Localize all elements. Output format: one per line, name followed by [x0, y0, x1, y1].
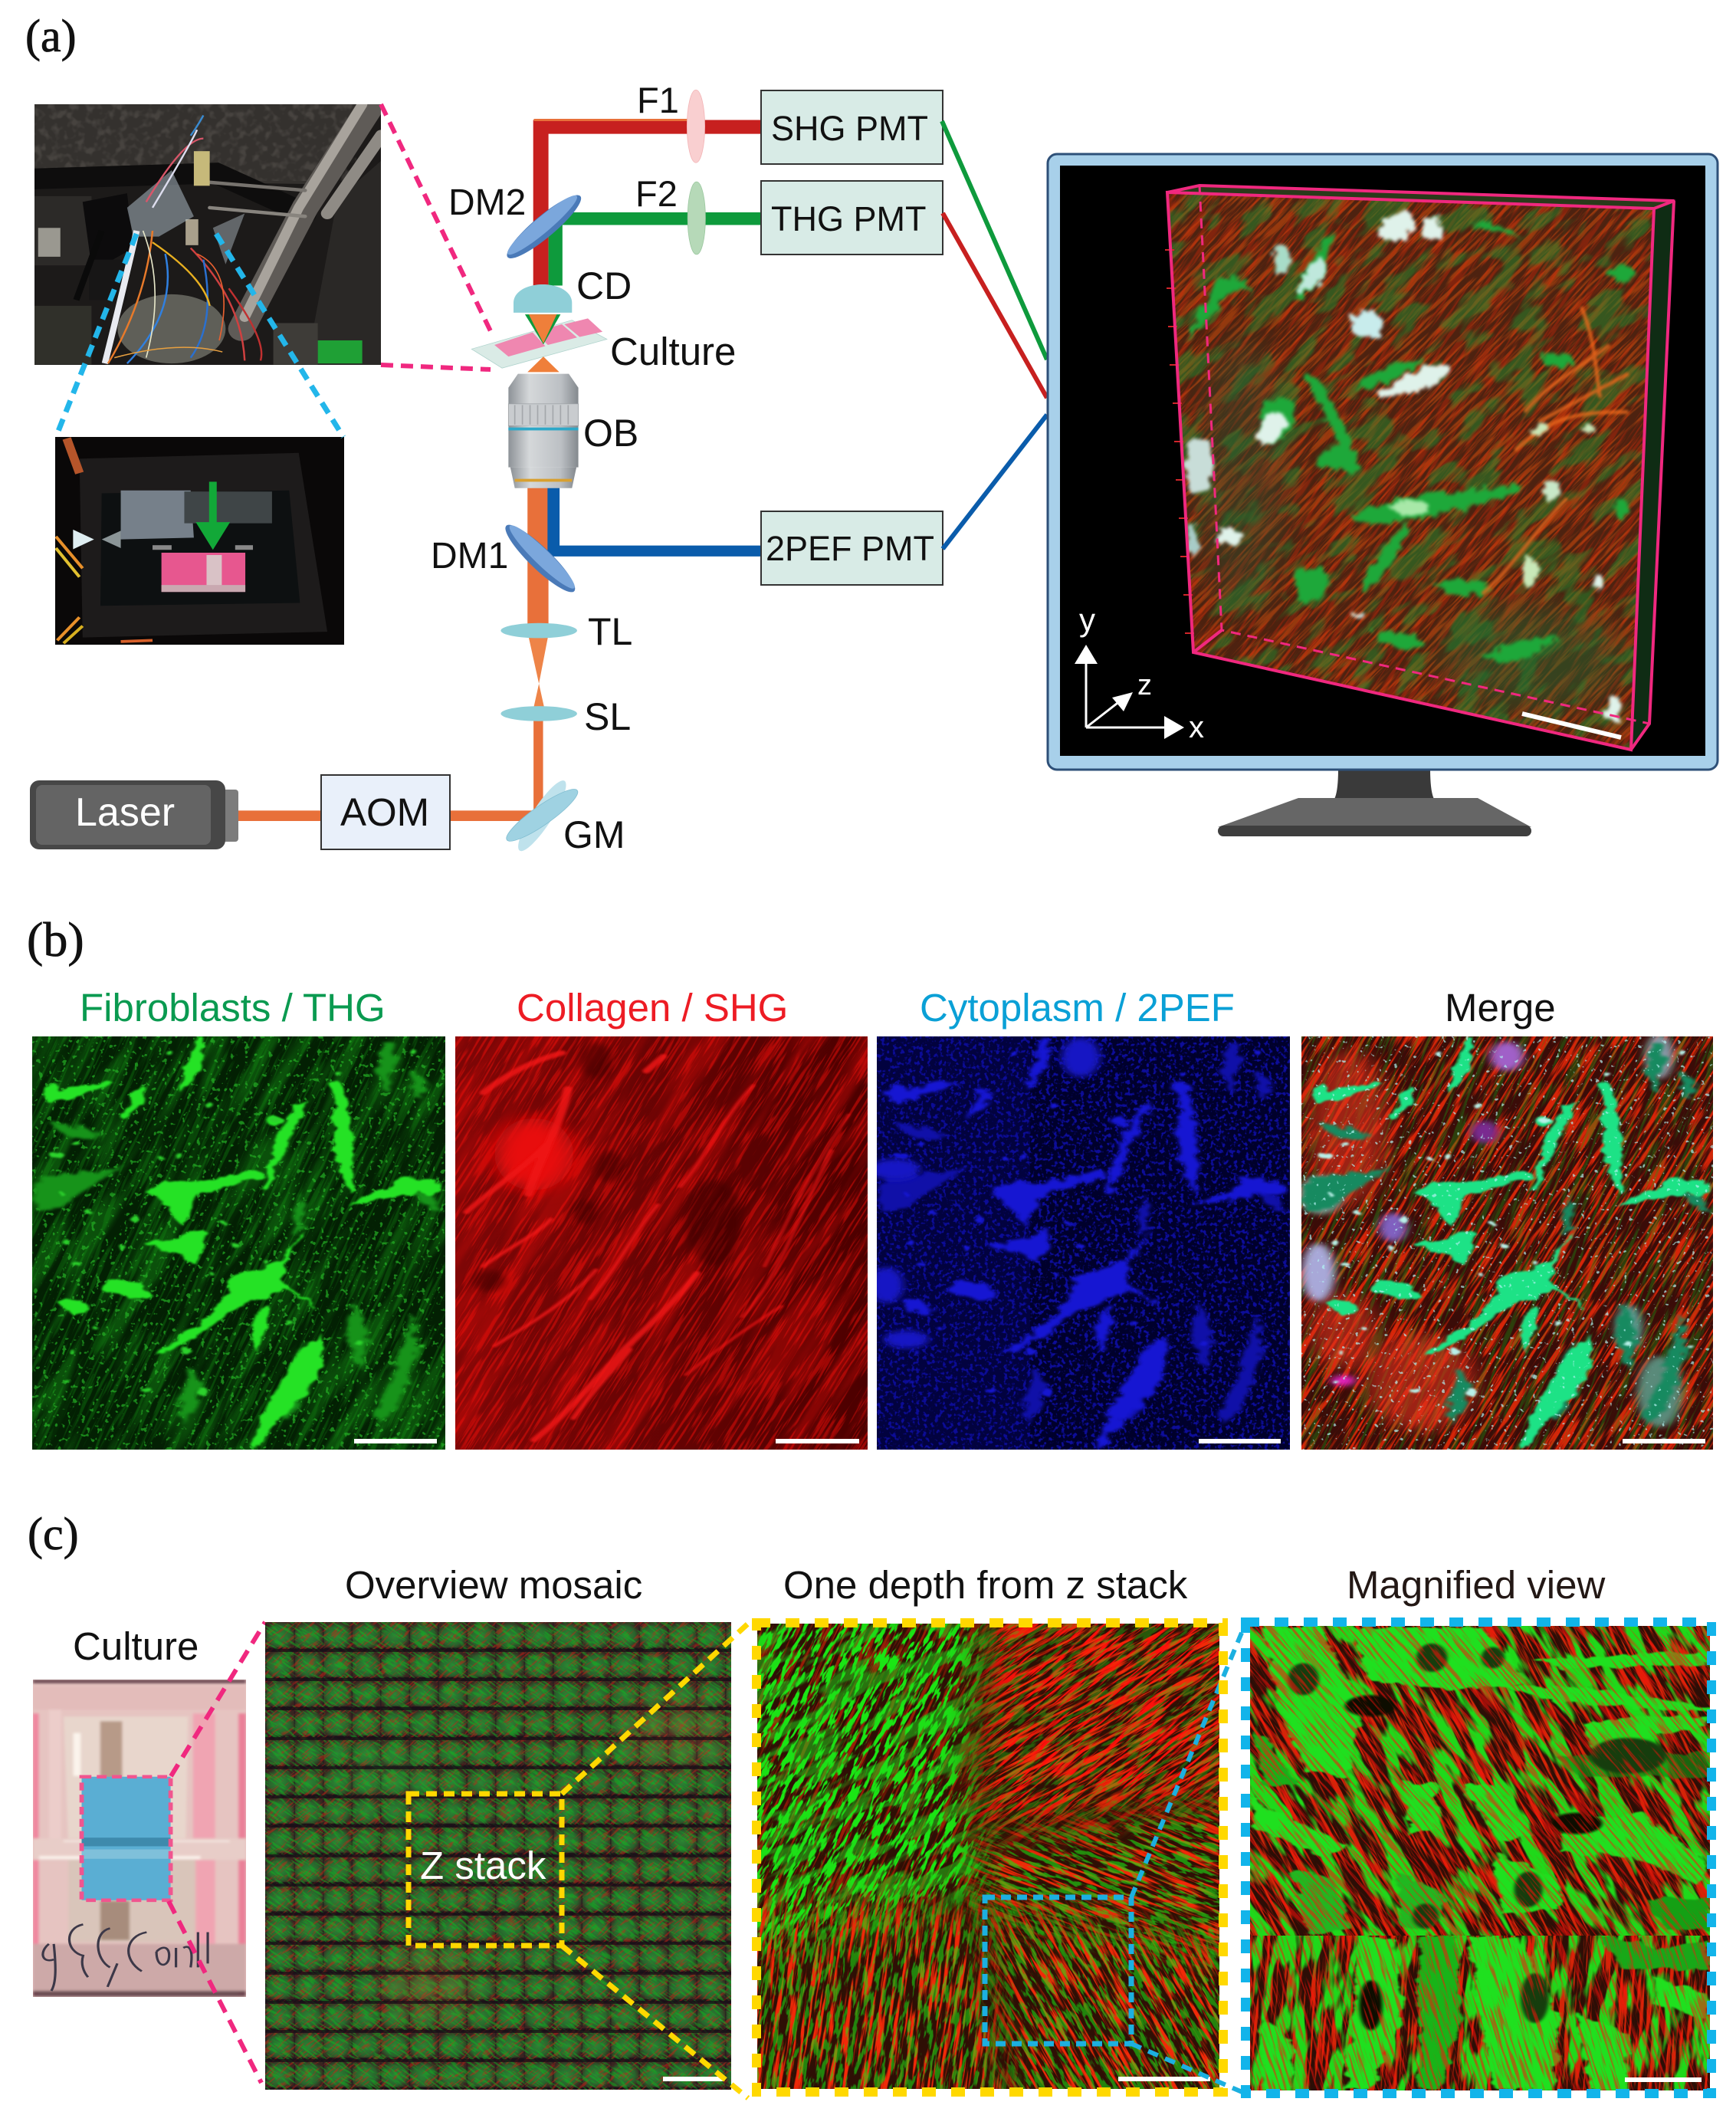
scale bar	[1199, 1439, 1281, 1443]
detector: THG PMT: THG PMT	[771, 199, 926, 238]
photo: equipment blocks	[34, 151, 363, 365]
lens: SL	[500, 706, 577, 721]
connector: yellow dashed lines to z-stack image	[562, 1624, 748, 2098]
optical labels: F1	[637, 80, 679, 120]
frame: yellow dashed border	[756, 1623, 1223, 2092]
volume: left ruler ticks	[1165, 250, 1194, 633]
optical diagram: beam paths	[238, 90, 761, 856]
culture: translucent body	[33, 1680, 246, 1997]
volume: pink bounding box, back edges	[1199, 186, 1674, 724]
photo: coloured wires at left	[56, 438, 153, 643]
micrograph: magnified view	[1250, 1626, 1710, 2090]
culture: handwritten marks	[43, 1924, 208, 1991]
filter: F2	[688, 182, 705, 255]
mosaic: row separators	[265, 1650, 731, 2061]
larger blue patches at left	[870, 1037, 1101, 1348]
panel: photo of culture in stage holder	[55, 437, 344, 645]
callout: Z stack dashed box: Z stack	[420, 1844, 546, 1887]
culture: blue imaged area	[82, 1777, 171, 1900]
optical labels: GM	[563, 813, 625, 856]
scale bar	[1625, 2077, 1702, 2082]
detector: SHG PMT	[761, 90, 943, 164]
monitor: stand	[1334, 769, 1435, 800]
volume: green cells	[1185, 222, 1634, 662]
heading: Fibroblasts / THG: Fibroblasts / THG	[80, 986, 386, 1030]
optical labels: TL	[588, 610, 632, 653]
icon: green arrow	[195, 481, 230, 550]
magnified: large green cell texture	[1250, 1626, 1710, 2090]
optical labels: F2	[635, 173, 678, 214]
optical labels: CD	[576, 264, 632, 307]
connector: cyan dashed zoom lines between photos	[56, 234, 343, 437]
connector: pink dashed zoom lines from culture to photo	[381, 104, 492, 369]
beam: red SHG path	[541, 127, 761, 286]
region: mid-right	[757, 1624, 1219, 2089]
AOM box	[321, 775, 450, 849]
micrograph: collagen SHG red	[455, 1036, 868, 1450]
heading: Overview mosaic: Overview mosaic	[345, 1563, 642, 1607]
scanning mirrors: GM	[500, 777, 583, 856]
lens: TL	[500, 623, 577, 638]
photo: white alignment triangles	[73, 530, 121, 549]
optical labels: SL	[584, 695, 631, 738]
photo: slide holder	[184, 491, 272, 524]
region: upper-left green cells	[757, 1624, 1219, 2089]
photo texture: acoustic foam background	[34, 104, 381, 365]
objective lens: OB	[508, 374, 579, 488]
3D image volume	[1150, 184, 1671, 759]
scale bar	[776, 1439, 859, 1443]
culture slide on stage	[471, 318, 607, 368]
micrograph: fibroblasts THG green	[32, 1036, 445, 1450]
signal lines to monitor	[942, 121, 1047, 549]
panel: photo of microscope stage	[34, 104, 382, 365]
bright collagen patch	[494, 1118, 573, 1191]
optical labels	[431, 80, 736, 856]
micrograph: overview mosaic	[265, 1622, 731, 2090]
photo: culture chamber	[33, 1680, 246, 1997]
merged: purple and lavender regions	[1299, 1033, 1682, 1427]
scale bar	[1623, 1439, 1705, 1443]
magnified: thin red fibres over cells	[1250, 1626, 1710, 2090]
photo: stage window	[100, 491, 300, 606]
laser source	[30, 780, 238, 849]
beam: focus cones	[525, 314, 560, 372]
magnified: red fibres under cells	[1250, 1626, 1710, 2090]
photo: pink culture slide	[153, 545, 253, 592]
beam: orange top edge	[534, 119, 688, 122]
micrograph: merged channels	[1299, 1033, 1713, 1450]
callout: magnified region dashed box	[985, 1897, 1131, 2044]
photo: stage plate	[80, 453, 327, 638]
scale bar	[1522, 714, 1621, 737]
axes xyz: y	[1079, 602, 1095, 638]
bright collagen bundles	[467, 1053, 848, 1440]
heading: Collagen / SHG: Collagen / SHG	[517, 986, 788, 1030]
monitor: frame	[1048, 154, 1718, 770]
beam: green THG path	[556, 218, 761, 286]
photo: optical rods	[34, 104, 382, 329]
heading: Culture: Culture	[73, 1624, 199, 1668]
filter: F1	[687, 90, 705, 163]
scale bar	[354, 1439, 437, 1443]
detector: SHG PMT: SHG PMT	[771, 109, 928, 148]
detector: 2PEF PMT: 2PEF PMT	[766, 529, 934, 568]
photo: glass reflection	[121, 491, 194, 540]
mosaic: brighter green and orange patches	[345, 1702, 728, 2016]
panel label (b): (b)	[27, 912, 84, 967]
scale bar	[663, 2077, 723, 2081]
monitor: screen	[1060, 166, 1705, 756]
merged: bright red regions	[1310, 1049, 1476, 1430]
beam: excitation orange thin vertical	[533, 710, 544, 819]
photo: translucent bags	[127, 170, 244, 264]
optical labels: DM1	[431, 536, 508, 576]
connector: cyan dashed lines to magnified view	[1131, 1624, 1245, 2094]
detector: THG PMT	[761, 181, 943, 255]
heading: Merge: Merge	[1445, 986, 1556, 1030]
axes xyz	[1075, 602, 1204, 744]
optical labels: DM2	[448, 182, 526, 223]
panel label (c): (c)	[28, 1509, 79, 1559]
frame: cyan dashed border	[1245, 1622, 1711, 2094]
beam: excitation orange horizontal	[238, 809, 534, 823]
optical labels: OB	[583, 412, 638, 455]
detector: 2PEF PMT	[761, 511, 943, 585]
volume: white blobs	[1185, 212, 1622, 723]
heading: Cytoplasm / 2PEF: Cytoplasm / 2PEF	[920, 986, 1235, 1030]
monitor: base	[1218, 798, 1531, 836]
beam: expanding hourglass	[529, 638, 548, 707]
laser source: Laser	[75, 790, 175, 835]
magnified: green cells	[1252, 1627, 1708, 2089]
region: bottom-left	[757, 1624, 1219, 2089]
callout: Z stack dashed box	[409, 1794, 562, 1946]
optical labels: Culture	[610, 330, 736, 373]
axes xyz: z	[1137, 669, 1152, 701]
panel label (a): (a)	[25, 11, 77, 61]
beam: blue 2PEF path	[553, 488, 761, 551]
dark voids	[472, 1042, 742, 1292]
region: bottom-right	[757, 1624, 1219, 2089]
condenser: CD	[514, 284, 572, 313]
photo: wires and cables	[77, 116, 261, 363]
heading: Magnified view: Magnified view	[1347, 1563, 1605, 1607]
heading: One depth from z stack: One depth from z stack	[783, 1563, 1188, 1607]
dichroic mirror: DM2	[500, 189, 588, 265]
beam: excitation orange thick	[527, 488, 549, 626]
scale bar	[1118, 2077, 1210, 2081]
monitor	[1048, 154, 1718, 836]
micrograph: one depth from z stack	[757, 1624, 1219, 2089]
axes xyz: x	[1189, 711, 1204, 744]
AOM box: AOM	[340, 790, 429, 834]
micrograph: cytoplasm 2PEF blue	[870, 1036, 1290, 1450]
magnified: dark nuclei and gaps	[1288, 1644, 1666, 2030]
region: upper-right swirl	[757, 1624, 1219, 2089]
side slices of volume	[1167, 186, 1674, 750]
connector: pink dashed from culture to mosaic	[169, 1622, 265, 2083]
volume: pink bounding box, front edges	[1167, 186, 1674, 750]
volume: orange fibres	[1482, 307, 1629, 594]
dichroic mirror: DM1	[498, 518, 582, 599]
